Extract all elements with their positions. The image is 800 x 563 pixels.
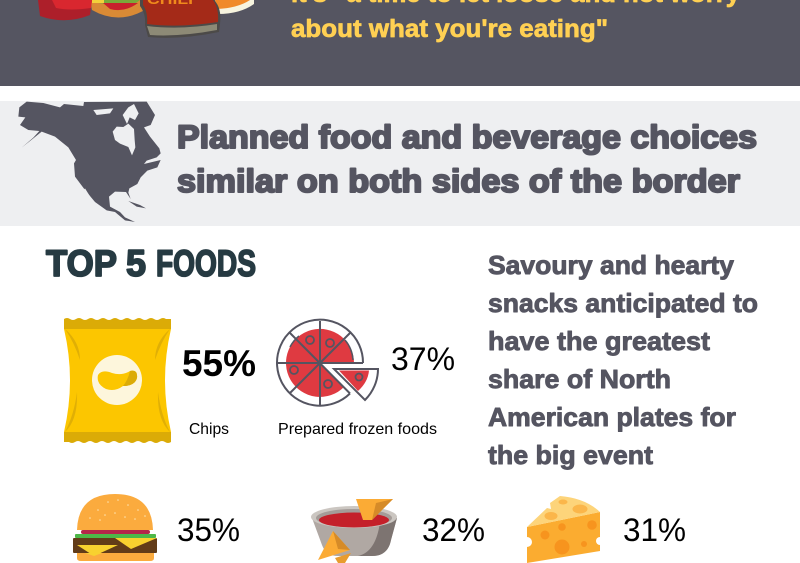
quote text <box>291 0 740 43</box>
icon: red cup <box>38 0 92 20</box>
item: chips <box>64 318 256 443</box>
panel: heading band <box>0 101 800 226</box>
value: 55%: 55% <box>182 343 256 384</box>
text block: savoury snacks <box>488 250 758 470</box>
text block: savoury snacks: Savoury and hearty <box>488 250 735 280</box>
item: burger <box>73 494 240 561</box>
icon: North America map <box>18 102 161 222</box>
value: 31%: 31% <box>623 512 686 548</box>
icon: plated burger <box>90 0 148 18</box>
label: chips: Chips <box>189 421 229 438</box>
text block: savoury snacks: the big event <box>488 440 653 470</box>
icon: orange dish <box>215 0 254 14</box>
item: cheese <box>522 496 686 563</box>
icon: salsa bowl <box>311 499 397 563</box>
value: 35%: 35% <box>177 512 240 548</box>
heading: top 5 foods: TOP <box>46 243 117 284</box>
text block: savoury snacks: share of North <box>488 364 671 394</box>
heading text: similar on both sides of the border <box>177 163 740 199</box>
quote text: about what you're eating" <box>291 15 608 43</box>
text block: savoury snacks: snacks anticipated to <box>488 288 758 318</box>
text block: savoury snacks: have the greatest <box>488 326 710 356</box>
item: salsa and chips <box>311 499 485 563</box>
heading: top 5 foods <box>46 243 256 284</box>
icon: chili boot <box>140 0 220 38</box>
icon: cheese <box>522 496 604 563</box>
icon: chip bag <box>64 318 171 443</box>
value: 32%: 32% <box>422 512 485 548</box>
text block: savoury snacks: American plates for <box>488 402 736 432</box>
value: 37%: 37% <box>391 341 455 377</box>
heading text <box>177 119 757 199</box>
heading: top 5 foods: FOODS <box>156 243 256 284</box>
heading text: Planned food and beverage choices <box>177 119 757 155</box>
panel: top quote banner <box>0 0 800 86</box>
label: prepared frozen foods: Prepared frozen foods <box>278 421 437 438</box>
icon: burger <box>73 494 157 561</box>
icon: pizza <box>277 320 378 406</box>
heading: top 5 foods: 5 <box>126 243 146 284</box>
item: prepared frozen foods <box>277 320 455 438</box>
